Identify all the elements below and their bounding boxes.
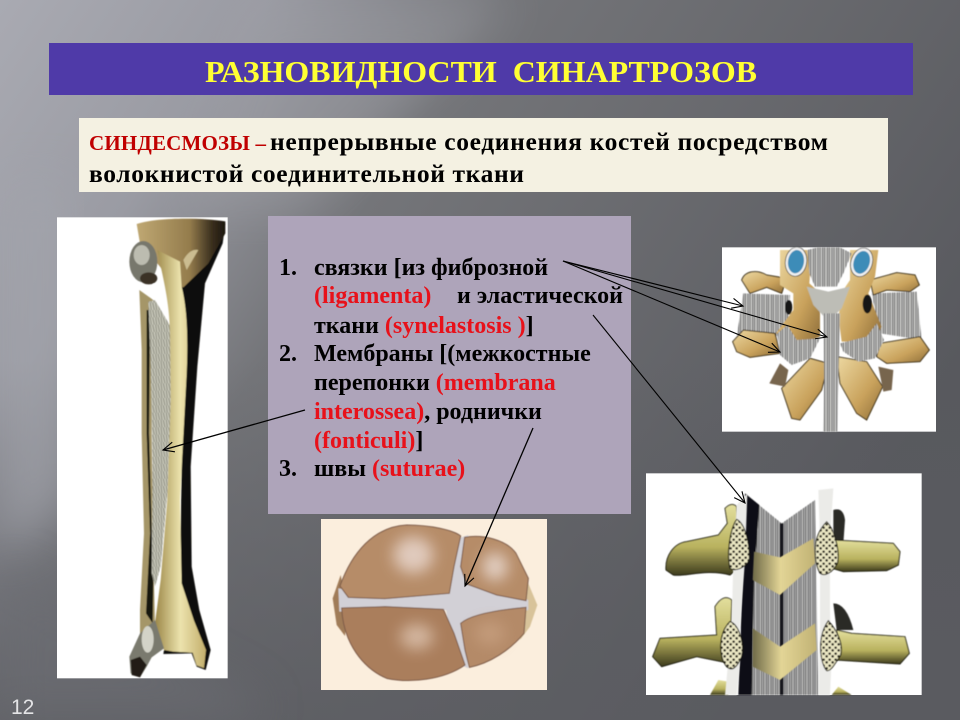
ossification highlights bbox=[393, 537, 508, 649]
spinous processes bbox=[782, 358, 828, 420]
list item 1: (ligamenta) bbox=[314, 283, 431, 309]
arrow: fontanelle to skull bbox=[465, 428, 533, 586]
definition text line 1: непрерывные соединения костей посредством bbox=[270, 127, 828, 156]
lower transverse processes bbox=[653, 598, 732, 667]
central striated ligament bbox=[743, 495, 818, 695]
list item 2 bbox=[279, 341, 591, 454]
list item 1: и эластической bbox=[457, 283, 623, 309]
list item 2: interossea), роднички bbox=[314, 399, 542, 425]
list item 1: 1. bbox=[279, 255, 297, 281]
panel: list of syndesmoses bbox=[268, 216, 631, 514]
membranous sutures bbox=[338, 535, 528, 668]
lower ligament fans bbox=[777, 325, 820, 365]
definition term: СИНДЕСМОЗЫ – bbox=[89, 131, 266, 155]
intertransverse ligaments bbox=[737, 293, 790, 337]
page number: 12 bbox=[11, 696, 34, 719]
image: skull of newborn with fontanelles bbox=[321, 519, 547, 690]
list item 3: швы (suturae) bbox=[314, 456, 465, 482]
title bar bbox=[49, 43, 913, 95]
frontal right bone bbox=[461, 536, 528, 601]
yellow chevrons bbox=[721, 488, 841, 695]
image: tibia and fibula with interosseous membrane bbox=[57, 217, 228, 678]
image: lumbar spine ligaments bbox=[722, 245, 936, 432]
parietal right bone bbox=[461, 607, 526, 667]
fibula head bbox=[129, 241, 157, 282]
definition box bbox=[79, 118, 888, 192]
fibula shaft bbox=[139, 290, 155, 640]
arrows: ligaments to lumbar spine bbox=[563, 261, 827, 352]
list item 2: 2. bbox=[279, 341, 297, 367]
tibia dark side bbox=[163, 223, 225, 670]
list item 2: перепонки (membrana bbox=[314, 370, 556, 396]
tibia head bbox=[137, 219, 225, 287]
definition text line 2: волокнистой соединительной ткани bbox=[89, 159, 524, 188]
parietal left bone bbox=[342, 607, 465, 680]
list item 1: ткани (synelastosis )] bbox=[314, 313, 534, 339]
tibia shaft bbox=[155, 250, 206, 668]
upper transverse processes bbox=[742, 272, 787, 293]
vertebra cross-sections bbox=[729, 519, 749, 570]
list item 2: (fonticuli)] bbox=[314, 428, 423, 454]
lower transverse processes bbox=[733, 330, 780, 357]
dark shadows behind right ligament bbox=[833, 509, 845, 543]
list item 1 bbox=[279, 255, 623, 339]
fibula distal end bbox=[129, 620, 164, 677]
arrow: membrane to bone bbox=[163, 410, 305, 450]
supraspinous ligament bbox=[823, 313, 840, 432]
white longitudinal ligaments bbox=[725, 493, 747, 695]
dark gaps bbox=[785, 300, 792, 315]
title: РАЗНОВИДНОСТИ СИНАРТРОЗОВ bbox=[205, 54, 757, 89]
side edges bbox=[333, 575, 347, 636]
upper transverse processes bbox=[666, 505, 740, 575]
list item 2: Мембраны [(межкостные bbox=[314, 341, 591, 367]
articular pillars bbox=[776, 250, 820, 345]
arrow: elastic tissue to vertebral column bbox=[593, 315, 745, 503]
interosseous membrane bbox=[148, 300, 172, 587]
frontal left bone bbox=[340, 525, 461, 599]
ligamenta flava fan bbox=[807, 247, 852, 287]
image: vertebral column cross-section bbox=[646, 473, 922, 695]
list item 3: 3. bbox=[279, 456, 297, 482]
blue articular surfaces bbox=[783, 246, 809, 278]
list item 1: связки [из фиброзной bbox=[314, 255, 548, 281]
